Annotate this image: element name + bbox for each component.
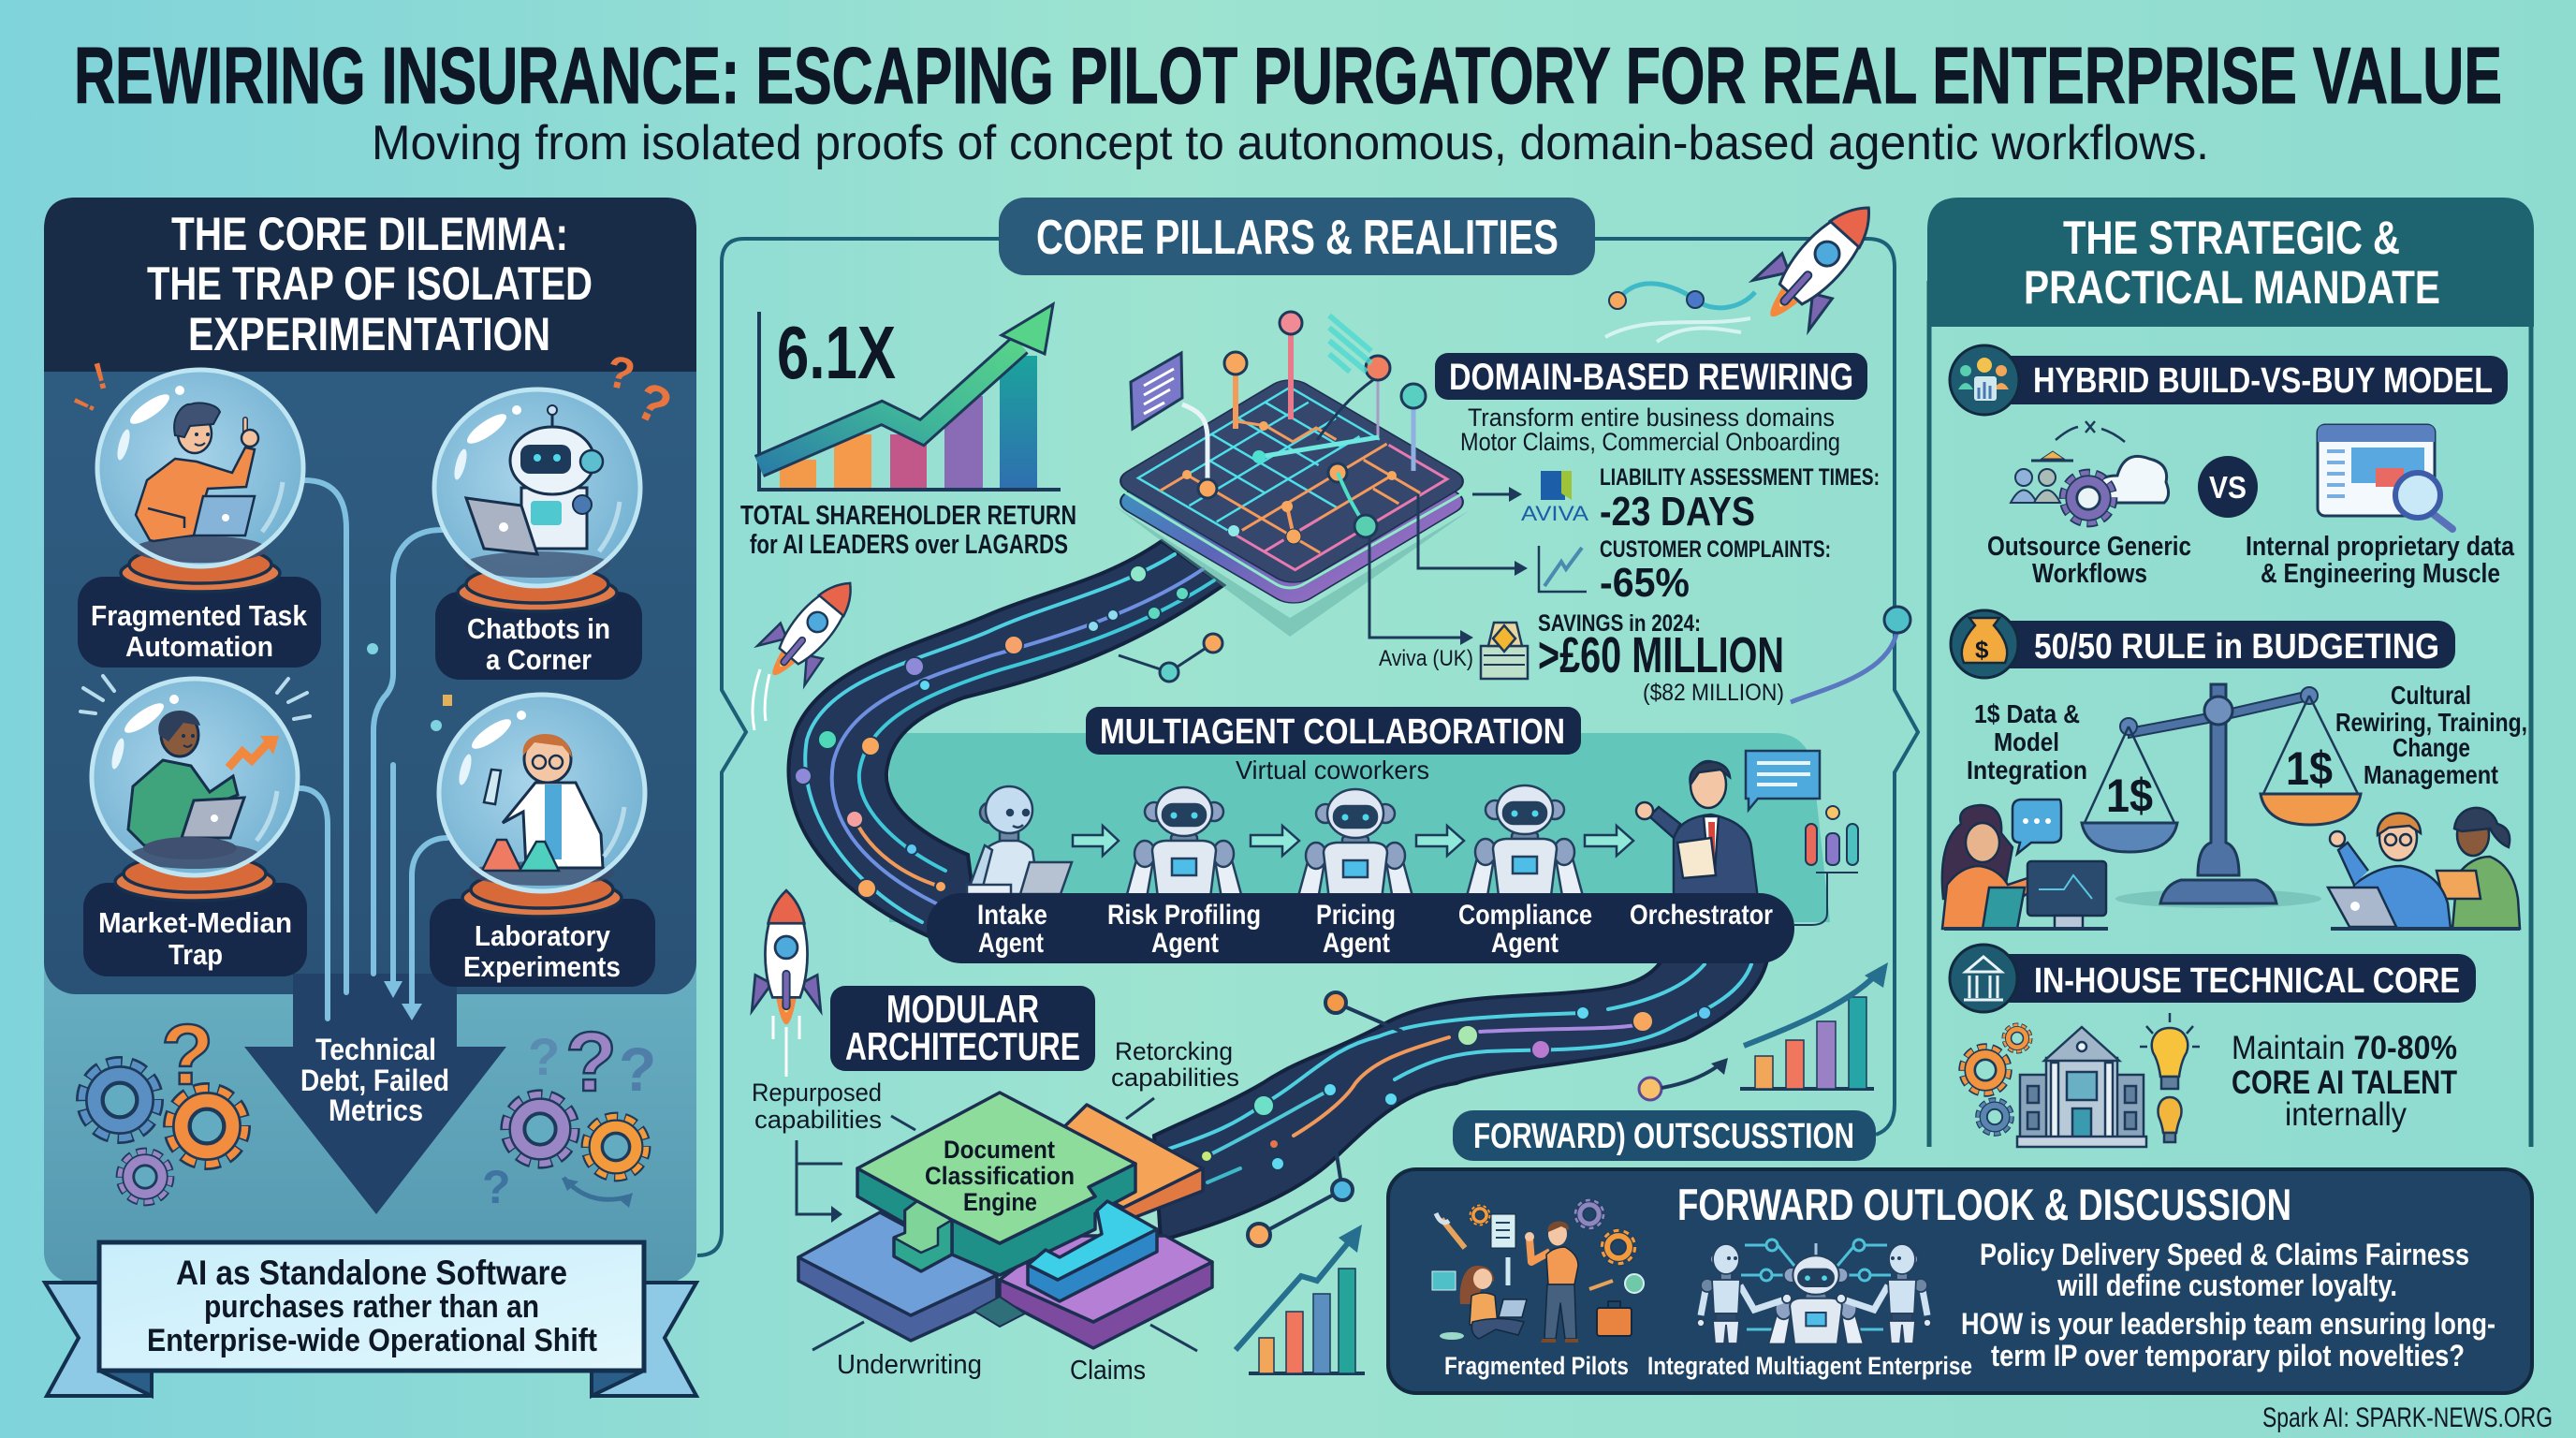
icon: money stack — [1481, 623, 1528, 679]
text: outsource generic workflows: Workflows — [2032, 559, 2147, 589]
label: fragmented task automation: Fragmented Task — [91, 599, 308, 632]
puzzle: core connector — [973, 1297, 1025, 1327]
text: technical debt, failed metrics: Technical — [315, 1033, 436, 1066]
illustration: integrated multiagent enterprise — [1697, 1240, 1931, 1344]
icon: exclamation marks: ! — [66, 393, 102, 416]
agent label bar: Agent — [1323, 928, 1390, 959]
chart caption — [740, 501, 1076, 560]
stat: liability assessment — [1600, 464, 1880, 535]
platform shadow — [1114, 506, 1470, 637]
rocket: left — [750, 564, 873, 730]
puzzle: underwriting block — [798, 1212, 997, 1341]
heading: core dilemma — [147, 208, 593, 360]
illustration: balance scale — [2082, 684, 2361, 908]
stat: liability assessment: LIABILITY ASSESSMENT TIMES: — [1600, 464, 1880, 491]
agent: pricing — [1297, 789, 1413, 900]
globe: market-median trap — [92, 679, 298, 901]
roadmap: upper road — [788, 541, 1223, 936]
icon: side nodes on road — [1119, 634, 1222, 682]
stat: 6.1x: 6.1X — [777, 311, 896, 394]
platform top — [1111, 374, 1472, 588]
label: chatbots in a corner: Chatbots in — [467, 612, 610, 645]
heading: hybrid build vs buy — [1989, 356, 2508, 404]
icon: left gears and question mark: ? — [161, 1007, 213, 1103]
label: market-median trap — [83, 883, 307, 976]
text: technical debt, failed metrics — [300, 1033, 449, 1127]
label: market-median trap: Market-Median — [98, 906, 292, 939]
text: data and model integration: Integration — [1967, 756, 2087, 785]
globe: fragmented task automation — [97, 370, 303, 592]
icon: complaints mini chart — [1539, 546, 1587, 592]
decorative dots — [367, 643, 452, 731]
arrow: converging to technical debt — [244, 974, 506, 1214]
panel: strategic mandate — [1927, 198, 2534, 1147]
text: data and model integration — [1967, 699, 2087, 785]
text: discussion: HOW is your leadership team ensuring long- — [1961, 1307, 2496, 1341]
icon: question marks — [602, 346, 681, 437]
label: chatbots in a corner — [435, 592, 642, 680]
panel lower background — [44, 843, 696, 1283]
panel background — [1388, 1169, 2532, 1393]
agent label bar: Risk Profiling — [1107, 900, 1261, 931]
puzzle: claims block — [1000, 1236, 1212, 1348]
ribbon callout: AI as Standalone Software — [176, 1254, 567, 1292]
chart: total shareholder return — [740, 304, 1076, 560]
label: market-median trap: Trap — [168, 938, 223, 971]
platform side — [1111, 395, 1472, 609]
rays around globe — [80, 676, 310, 719]
puzzle: document classification engine: Classification — [925, 1162, 1075, 1190]
chart caption: for AI LEADERS over LAGARDS — [750, 530, 1068, 560]
text: cultural rewiring: Rewiring, Training, — [2335, 708, 2527, 737]
text: repurposed capabilities: Repurposed — [752, 1078, 882, 1107]
section: domain-based rewiring — [1379, 353, 1910, 706]
icon: exclamation marks: ! — [89, 355, 111, 398]
agent: risk profiling — [1126, 787, 1242, 898]
connector arrowheads — [384, 981, 422, 1020]
heading: multiagent collaboration: MULTIAGENT COLLABORATION — [1100, 712, 1565, 752]
arrows: platform to metrics — [1369, 494, 1518, 638]
agent label bar: Agent — [1151, 928, 1219, 959]
text: outsource generic workflows — [1987, 532, 2191, 589]
stat: savings: SAVINGS in 2024: — [1538, 610, 1701, 637]
label: underwriting: Underwriting — [837, 1350, 982, 1380]
panel dark body — [44, 198, 696, 994]
puzzle: document classification engine: Engine — [963, 1188, 1037, 1216]
agent label bar: Compliance — [1458, 900, 1592, 931]
stat: savings: ($82 MILLION) — [1643, 680, 1784, 706]
icon: vs badge — [2198, 456, 2258, 518]
text: retorcking capabilities: capabilities — [1111, 1064, 1239, 1092]
heading: 50/50 rule — [1989, 621, 2455, 668]
chart: lower center bars — [1236, 1225, 1365, 1373]
agent label bar: Orchestrator — [1630, 900, 1773, 931]
section: multiagent collaboration — [927, 707, 1858, 963]
chart: upper right bars — [1639, 962, 1888, 1100]
chart axes — [759, 312, 1061, 490]
text: cultural rewiring: Change — [2393, 733, 2470, 762]
text: retorcking capabilities — [1111, 1037, 1239, 1092]
puzzle: document classification engine — [857, 1093, 1135, 1275]
label: claims: Claims — [1070, 1356, 1146, 1386]
label: laboratory experiments — [430, 899, 655, 987]
puzzle: orange block — [1030, 1105, 1203, 1217]
icon: right gears and question marks — [482, 1016, 656, 1213]
rocket: upright — [752, 890, 821, 1077]
text: domain description: Transform entire business domains — [1468, 404, 1835, 432]
heading: core dilemma: EXPERIMENTATION — [188, 308, 550, 360]
panel: forward outlook and discussion — [1388, 1169, 2532, 1393]
heading: in-house technical core — [1989, 954, 2476, 1003]
text: discussion: term IP over temporary pilot novelties? — [1991, 1339, 2465, 1372]
stat: savings: >£60 MILLION — [1538, 627, 1784, 683]
growth arrow — [759, 304, 1053, 466]
illustration: training pair — [2328, 808, 2520, 929]
text: discussion — [1961, 1238, 2496, 1372]
pill: forward garbled label: FORWARD) OUTSCUSSTION — [1473, 1117, 1854, 1156]
connector lines from globes — [300, 480, 447, 1019]
label: integrated multiagent enterprise: Integrated Multiagent Enterprise — [1647, 1352, 1972, 1380]
center frame outline — [697, 239, 1918, 1255]
heading: 50/50 rule: 50/50 RULE in BUDGETING — [2034, 627, 2439, 667]
illustration: balance scale: 1$ — [2106, 770, 2153, 822]
globe: chatbots in a corner — [434, 389, 640, 611]
text: data and model integration: 1$ Data & — [1974, 699, 2080, 728]
icon: right gears and question marks: ? — [565, 1016, 617, 1109]
chart caption: TOTAL SHAREHOLDER RETURN — [740, 501, 1076, 531]
puzzle: document classification engine: Document — [944, 1136, 1055, 1164]
icon: pin beside savings — [1791, 607, 1910, 702]
circuit grid — [1138, 388, 1447, 570]
text: discussion: Policy Delivery Speed & Claims Fairness — [1980, 1238, 2469, 1271]
text: cultural rewiring: Management — [2364, 760, 2498, 789]
text: retorcking capabilities: Retorcking — [1115, 1037, 1233, 1065]
icon: mini bar tubes — [1794, 806, 1858, 925]
chart bars — [780, 356, 1037, 490]
text: repurposed capabilities: capabilities — [754, 1106, 882, 1134]
icon: document flag — [1131, 353, 1182, 429]
text: maintain core ai talent: internally — [2285, 1096, 2407, 1133]
icon: team circle — [1950, 345, 2019, 415]
leader lines — [797, 1098, 1197, 1351]
icon: browser with magnifier — [2318, 425, 2452, 529]
pill: forward garbled label — [1453, 1110, 1876, 1161]
heading: modular architecture — [830, 986, 1095, 1071]
heading: domain-based rewiring: DOMAIN-BASED REWIRING — [1449, 357, 1853, 398]
label: fragmented pilots: Fragmented Pilots — [1444, 1352, 1629, 1380]
agent: compliance — [1467, 785, 1583, 896]
text: internal proprietary data: & Engineering Muscle — [2261, 559, 2500, 589]
text: cultural rewiring: Cultural — [2391, 681, 2471, 710]
heading: strategic mandate: THE STRATEGIC & — [2063, 212, 2400, 264]
platform pins — [1182, 312, 1426, 544]
text: cultural rewiring — [2335, 681, 2527, 789]
platform: domain grid — [1111, 312, 1472, 637]
icon: left gears and question mark — [86, 1007, 241, 1199]
label: laboratory experiments: Laboratory — [475, 919, 611, 952]
text: outsource generic workflows: Outsource Generic — [1987, 532, 2191, 562]
icon: question marks: ? — [626, 370, 681, 437]
heading: in-house technical core: IN-HOUSE TECHNICAL CORE — [2034, 961, 2460, 1001]
text: repurposed capabilities — [752, 1078, 882, 1134]
stat: customer complaints: CUSTOMER COMPLAINTS: — [1600, 536, 1831, 563]
text: maintain core ai talent: Maintain 70-80% — [2232, 1030, 2457, 1066]
text: technical debt, failed metrics: Debt, Failed — [300, 1064, 449, 1097]
illustration: woman at monitor — [1942, 800, 2106, 929]
text: internal proprietary data — [2246, 532, 2515, 589]
icon: money bag — [1951, 610, 2018, 678]
heading: strategic mandate — [2024, 212, 2440, 314]
arrowheads: platform to metrics — [1460, 487, 1528, 645]
text: internal proprietary data: Internal proprietary data — [2246, 532, 2515, 562]
icon: aviva logo — [1521, 471, 1588, 525]
stat: savings — [1538, 610, 1784, 706]
agent label bar: Agent — [1491, 928, 1559, 959]
floor lines — [1944, 927, 2520, 931]
heading: core pillars and realities — [999, 198, 1595, 275]
panel header — [1927, 198, 2534, 327]
icon: nodes around lower road — [1248, 992, 1402, 1246]
roadmap: lower road — [1154, 960, 1767, 1240]
text: domain description — [1460, 404, 1840, 456]
agent label bar — [927, 893, 1794, 963]
subtitle: Moving from isolated proofs of concept to autonomous, domain-based agentic workflows. — [372, 116, 2209, 170]
ribbon callout: purchases rather than an — [204, 1289, 539, 1325]
icon: gears — [1965, 1026, 2029, 1132]
icon: vs badge: VS — [2209, 470, 2247, 505]
icon: right gears and question marks: ? — [482, 1161, 511, 1213]
text: aviva uk: Aviva (UK) — [1379, 646, 1473, 671]
text: discussion: will define customer loyalty. — [2056, 1269, 2397, 1302]
text: virtual coworkers: Virtual coworkers — [1236, 756, 1429, 785]
icon: striped data flag — [1329, 315, 1371, 372]
icon: outsource cloud and gear — [2011, 421, 2169, 521]
text: domain description: Motor Claims, Commercial Onboarding — [1460, 428, 1840, 456]
ribbon callout: Enterprise-wide Operational Shift — [147, 1323, 597, 1358]
heading: strategic mandate: PRACTICAL MANDATE — [2024, 261, 2440, 314]
section: modular architecture — [752, 986, 1239, 1386]
person: orchestrator — [1636, 761, 1758, 899]
text: maintain core ai talent — [2232, 1030, 2457, 1133]
agent label bar: Pricing — [1316, 900, 1396, 931]
panel: core dilemma — [44, 198, 696, 1396]
platform rim highlights — [1116, 487, 1468, 588]
stat: customer complaints — [1600, 536, 1831, 606]
ribbon callout — [45, 1242, 696, 1396]
roadmap backdrop: teal band — [889, 733, 1830, 922]
heading: core dilemma: THE TRAP OF ISOLATED — [147, 257, 593, 310]
text: technical debt, failed metrics: Metrics — [329, 1093, 423, 1127]
heading: forward outlook: FORWARD OUTLOOK & DISCUSSION — [1677, 1180, 2291, 1229]
rocket: top right — [1605, 183, 1896, 342]
icon: exclamation marks — [66, 355, 111, 416]
icon: money bag: $ — [1975, 636, 1989, 664]
heading: modular architecture: ARCHITECTURE — [845, 1024, 1080, 1068]
text: maintain core ai talent: CORE AI TALENT — [2232, 1064, 2457, 1101]
icon: light bulbs — [2140, 1013, 2200, 1142]
label: fragmented task automation: Automation — [125, 630, 273, 663]
panel outline — [1929, 281, 2531, 1147]
stat: customer complaints: -65% — [1600, 560, 1690, 606]
label: laboratory experiments: Experiments — [463, 950, 621, 983]
illustration: balance scale: 1$ — [2286, 742, 2333, 795]
globe: laboratory experiments — [439, 695, 645, 917]
illustration: fragmented pilots — [1432, 1202, 1644, 1343]
stat: liability assessment: -23 DAYS — [1600, 489, 1755, 535]
agent label bar: Agent — [978, 928, 1044, 959]
agent flow arrows — [1073, 826, 1633, 856]
agent: intake — [967, 786, 1072, 894]
label: chatbots in a corner: a Corner — [486, 643, 592, 676]
panel header — [44, 198, 696, 372]
icon: aviva logo: AVIVA — [1521, 502, 1588, 525]
heading: hybrid build vs buy: HYBRID BUILD-VS-BUY MODEL — [2033, 361, 2493, 401]
heading: core pillars and realities: CORE PILLARS & REALITIES — [1036, 211, 1559, 265]
puzzle: cyan block — [1028, 1201, 1157, 1301]
heading: core dilemma: THE CORE DILEMMA: — [171, 208, 568, 260]
icon: right gears and question marks: ? — [619, 1034, 656, 1104]
icon: right gears and question marks: ? — [528, 1027, 560, 1086]
icon: speech bubble — [1746, 751, 1820, 810]
label: fragmented task automation — [78, 577, 321, 668]
heading: modular architecture: MODULAR — [886, 987, 1039, 1031]
icon: question marks: ? — [602, 346, 639, 401]
arrowhead: repurposed — [831, 1206, 842, 1223]
icon: institution circle — [1950, 945, 2017, 1012]
icon: headquarters building — [2017, 1027, 2146, 1147]
agent label bar: Intake — [977, 900, 1047, 931]
text: data and model integration: Model — [1994, 727, 2059, 756]
